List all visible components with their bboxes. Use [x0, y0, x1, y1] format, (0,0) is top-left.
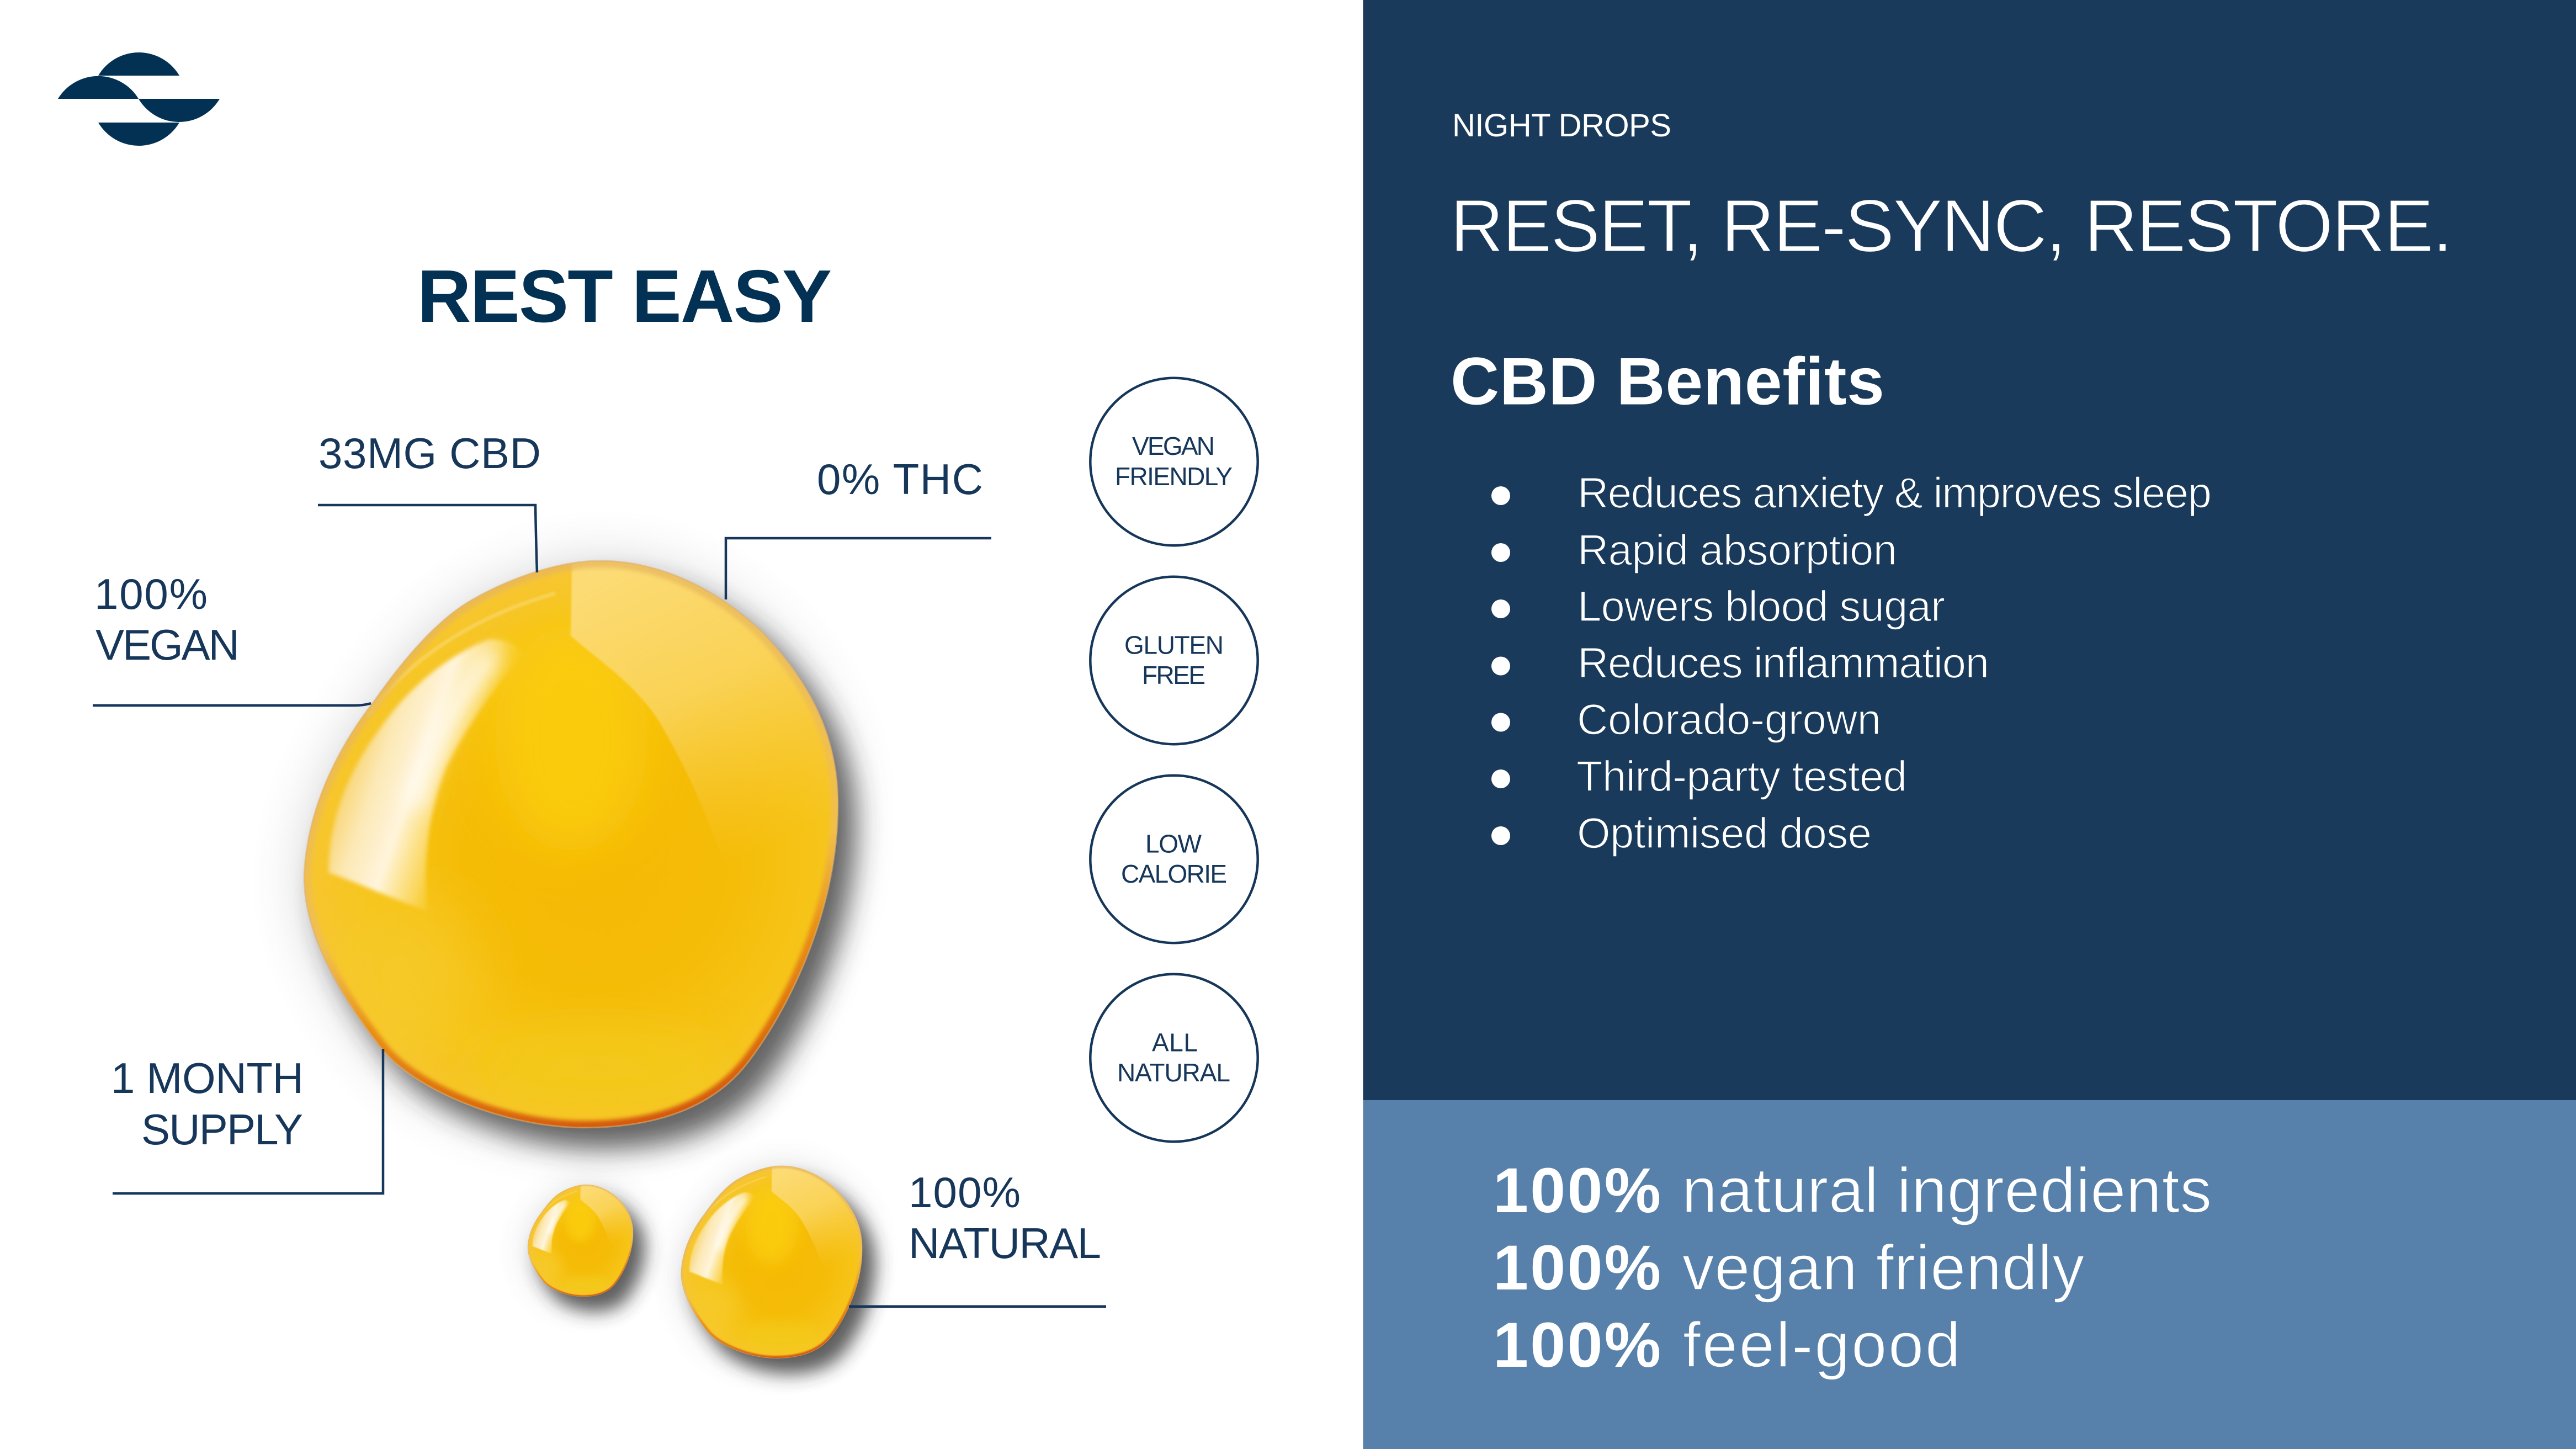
claim: vegan friendly: vegan friendly: [1682, 1233, 2084, 1303]
claim: vegan friendly: [1493, 1233, 2084, 1303]
callout: 0% THC: 0% THC: [817, 455, 983, 503]
title: REST EASY: REST EASY: [417, 254, 832, 338]
claim: feel-good: feel-good: [1683, 1310, 1961, 1381]
panel: night drops benefits: [1363, 0, 2576, 1100]
callout: 1 MONTH SUPPLY: SUPPLY: [141, 1105, 303, 1154]
claim: feel-good: [1493, 1310, 1961, 1381]
badge: low calorie: CALORIE: [1121, 859, 1227, 888]
claim: natural ingredients: 100%: [1493, 1155, 1661, 1226]
callout: 1 MONTH SUPPLY: 1 MONTH: [111, 1054, 304, 1102]
small oil drop: [528, 1182, 645, 1312]
medium oil drop: [681, 1162, 875, 1374]
callout: 100% NATURAL: [849, 1168, 1106, 1307]
callout: 100% VEGAN: [93, 570, 371, 705]
badge: gluten free: [1090, 577, 1258, 744]
benefits list: [1491, 468, 2212, 857]
badge: all natural: NATURAL: [1117, 1058, 1230, 1087]
badge: gluten free: GLUTEN: [1124, 630, 1224, 659]
heading: reset, re-sync, restore: RESET, RE-SYNC, RESTORE.: [1450, 184, 2453, 267]
badge: gluten free: FREE: [1142, 661, 1205, 689]
badge: all natural: ALL: [1152, 1028, 1198, 1057]
benefits list: Third-party tested: [1576, 752, 1907, 800]
callout: 100% VEGAN: 100%: [94, 570, 208, 618]
callout: 100% NATURAL: 100%: [909, 1168, 1021, 1217]
badge: vegan friendly: VEGAN: [1132, 432, 1215, 460]
callout: 33MG CBD: [318, 429, 541, 572]
large oil drop: [304, 549, 863, 1149]
claim: vegan friendly: 100%: [1493, 1233, 1661, 1303]
callout: 100% VEGAN: VEGAN: [95, 620, 240, 669]
badge: vegan friendly: [1090, 378, 1258, 545]
claim: feel-good: 100%: [1493, 1310, 1661, 1381]
callout: 0% THC: [726, 455, 991, 599]
benefits list: Reduces inflammation: [1578, 638, 1989, 687]
badge: low calorie: [1090, 776, 1258, 943]
badge: vegan friendly: FRIENDLY: [1115, 462, 1233, 491]
benefits list: Rapid absorption: [1578, 526, 1897, 574]
subheading: CBD Benefits: CBD Benefits: [1451, 343, 1884, 418]
benefits list: Colorado-grown: [1577, 695, 1881, 744]
benefits list: Lowers blood sugar: [1578, 582, 1945, 630]
badge: all natural: [1090, 974, 1258, 1142]
callout: 33MG CBD: 33MG CBD: [318, 429, 541, 477]
callout: 100% NATURAL: NATURAL: [909, 1219, 1101, 1267]
benefits list: Reduces anxiety & improves sleep: [1578, 468, 2212, 517]
logo: [58, 52, 220, 146]
callout: 1 MONTH SUPPLY: [111, 1049, 383, 1193]
benefits list: Optimised dose: [1577, 809, 1872, 857]
badge: low calorie: LOW: [1145, 829, 1202, 858]
panel: 100% claims: [1363, 1100, 2576, 1449]
eyebrow: NIGHT DROPS: NIGHT DROPS: [1452, 108, 1671, 144]
claim: natural ingredients: natural ingredients: [1682, 1155, 2212, 1226]
